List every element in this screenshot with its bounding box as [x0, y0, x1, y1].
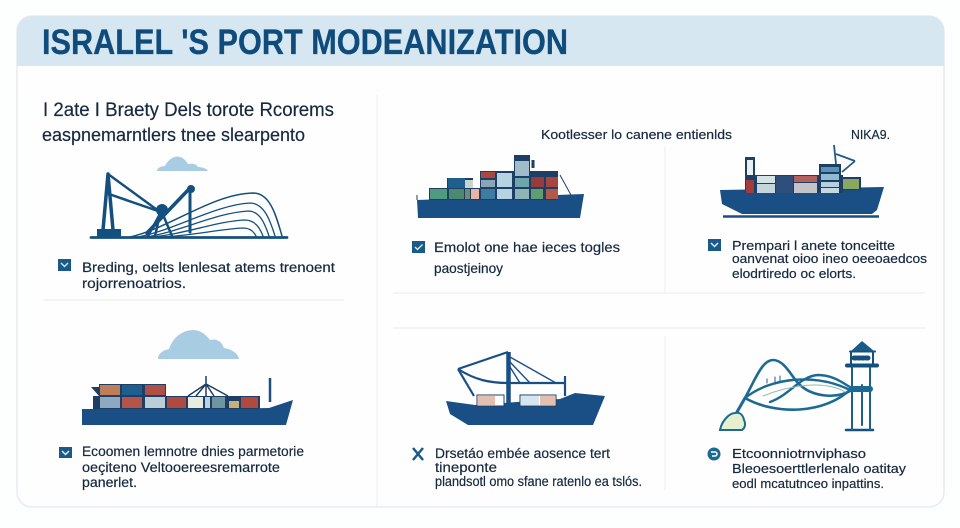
bullet text	[434, 239, 620, 276]
bullet text: eodl mcatutnceo inpattins.	[732, 476, 884, 491]
bullet text: rojorrenoatrios.	[82, 276, 186, 291]
bullet: ship 2	[708, 238, 928, 281]
icon: container ship 1	[417, 155, 584, 218]
column heading: Kootlesser lo canene entienlds	[541, 127, 733, 142]
icon: cloud bottom	[158, 330, 239, 359]
bullet text	[732, 446, 907, 491]
bullet text: Ecoomen lemnotre dnies parmetorie	[82, 444, 304, 459]
icon: check	[58, 259, 71, 271]
icon: check	[412, 241, 425, 253]
bullet text: paostjeinoy	[434, 260, 503, 276]
bullet text	[82, 444, 304, 490]
bullet text: Drsetáo embée aosence tert	[435, 446, 610, 461]
column heading: code: NIKA9.	[851, 127, 890, 142]
bullet text: Etcoonniotrnviphaso	[732, 446, 866, 461]
title: ISRALEL 'S PORT MODEANIZATION	[42, 23, 568, 62]
icon: cross	[413, 448, 423, 460]
icon: crane and cables	[91, 174, 287, 238]
bullet: ship 1	[412, 239, 620, 276]
bullet: bridge	[708, 446, 907, 491]
bullet text: tineponte	[435, 460, 497, 475]
bullet text: Emolot one hae ieces togles	[434, 239, 620, 255]
bullet text: Breding, oelts lenlesat atems trenoent	[82, 260, 335, 275]
intro text: I 2ate I Braety Dels torote Rcorems	[43, 100, 334, 121]
bullet: left top	[58, 259, 335, 291]
icon: check	[59, 447, 72, 458]
icon: container ship 3	[82, 376, 293, 425]
bullet text	[435, 446, 642, 489]
header band	[17, 16, 944, 66]
bullet text: oeçiteno Veltooereesremarrote	[82, 460, 280, 475]
bullet text: panerlet.	[82, 475, 137, 490]
bullet text: Bleoesoerttlerlenalo oatitay	[732, 461, 907, 476]
bullet text: Prempari l anete tonceitte	[732, 238, 895, 253]
bullet: crane vessel	[413, 446, 642, 489]
icon: check	[708, 239, 721, 251]
intro text	[42, 100, 334, 145]
bullet text: oanvenat oioo ineo oeeoaedcos	[732, 251, 928, 266]
intro text: easpnemarntlers tnee slearpento	[42, 125, 305, 145]
bullet text	[82, 260, 335, 291]
bullet text	[732, 238, 928, 281]
icon: crane vessel	[446, 352, 605, 425]
bullet text: plandsotl omo sfane ratenlo ea tslós.	[435, 474, 642, 489]
icon: container ship 2	[720, 145, 884, 216]
icon: cloud top	[157, 157, 208, 171]
icon: badge	[708, 448, 720, 460]
icon: bridge and lighthouse	[720, 341, 877, 430]
bullet text: elodrtiredo oc elorts.	[732, 266, 856, 281]
bullet: ship 3	[59, 444, 304, 490]
